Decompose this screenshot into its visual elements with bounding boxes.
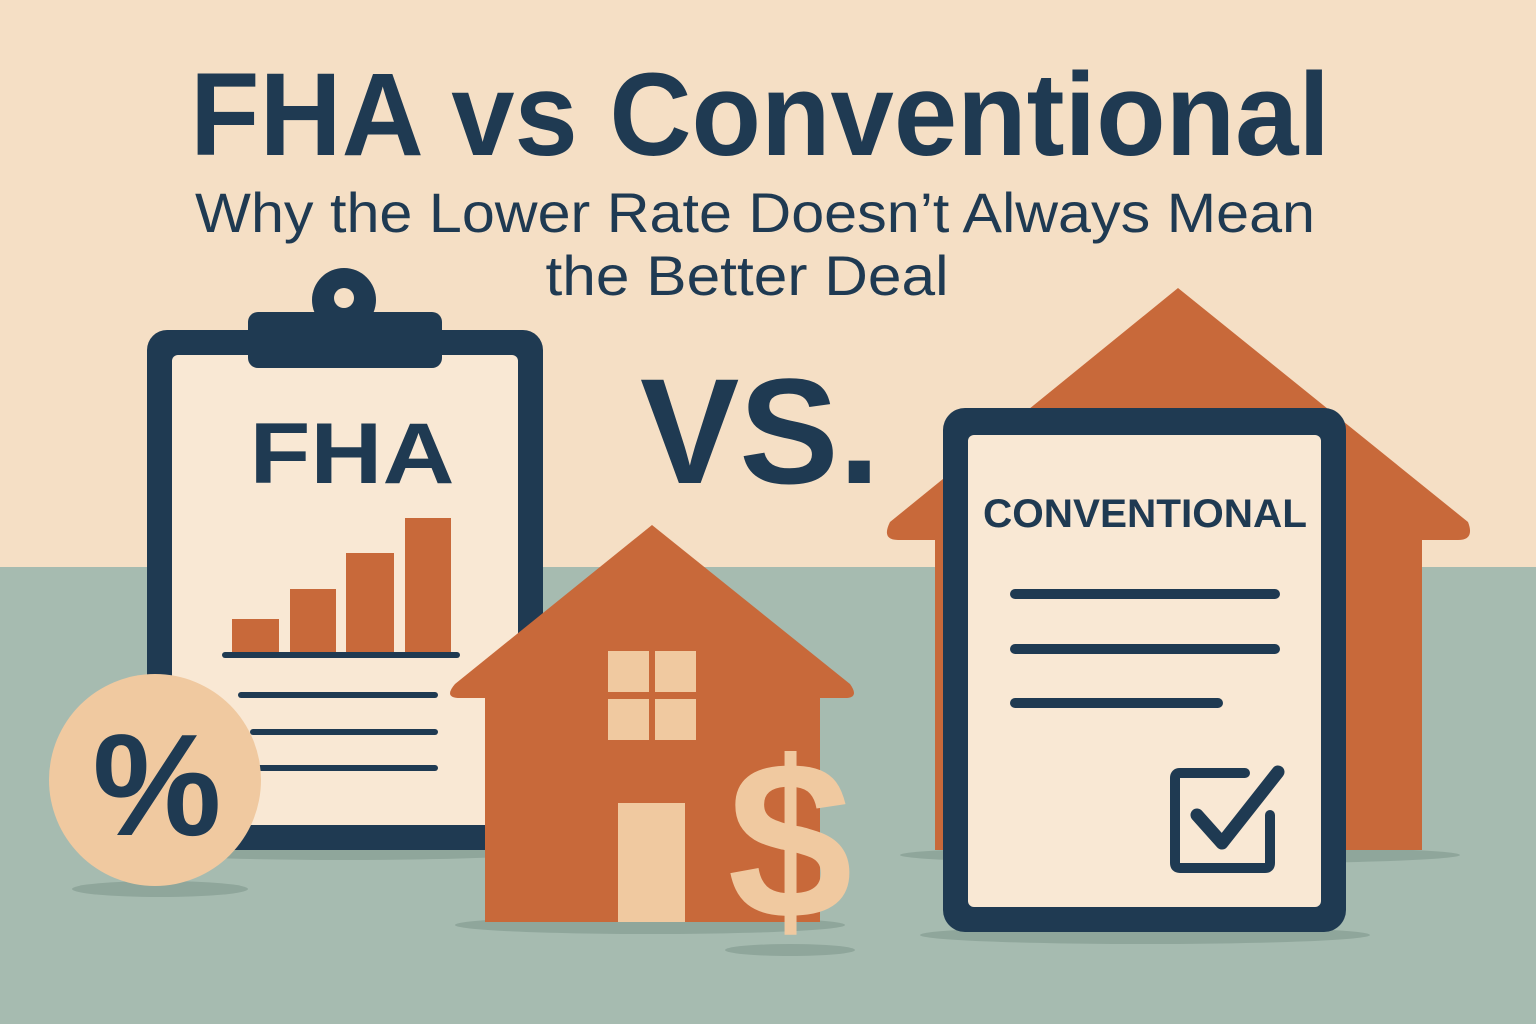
subtitle [195, 181, 1315, 307]
window [608, 651, 696, 740]
small house [450, 525, 854, 934]
icon: percent circle: % [93, 704, 221, 866]
VS text: VS. [640, 347, 880, 515]
text lines [238, 692, 438, 771]
document: conventional [920, 408, 1370, 944]
big house behind conventional [887, 288, 1470, 864]
subtitle: the Better Deal [546, 244, 948, 307]
icon: dollar sign: $ [727, 714, 853, 966]
FHA label: FHA [250, 406, 454, 502]
clip [248, 268, 442, 368]
icon: checkbox [1175, 772, 1278, 868]
clipboard: FHA [145, 268, 545, 860]
CONVENTIONAL label: CONVENTIONAL [983, 492, 1307, 536]
subtitle: Why the Lower Rate Doesn’t Always Mean [195, 181, 1315, 244]
bar chart [222, 518, 460, 658]
text lines [1015, 594, 1275, 703]
title: FHA vs Conventional [190, 49, 1330, 181]
icon: percent circle [49, 674, 261, 897]
door [618, 803, 685, 922]
